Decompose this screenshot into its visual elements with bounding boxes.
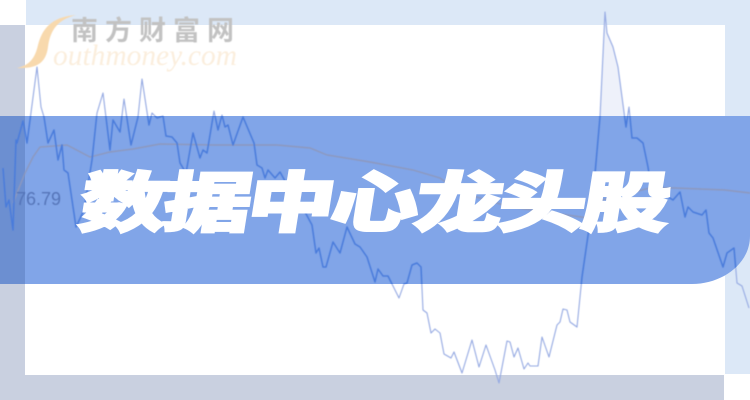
watermark logo [17, 15, 237, 72]
blue price line inside the band [2, 116, 737, 284]
logo Chinese name: 南方财富网 [71, 15, 234, 46]
area fill under price peak [600, 12, 626, 127]
axis value label: 76.79 [16, 189, 61, 209]
logo domain: outhmoney.com [53, 39, 237, 72]
grey moving-average line [13, 144, 750, 218]
blue title band [0, 116, 750, 284]
title: 数据中心龙头股 [75, 168, 676, 240]
logo S swoosh [17, 15, 76, 68]
